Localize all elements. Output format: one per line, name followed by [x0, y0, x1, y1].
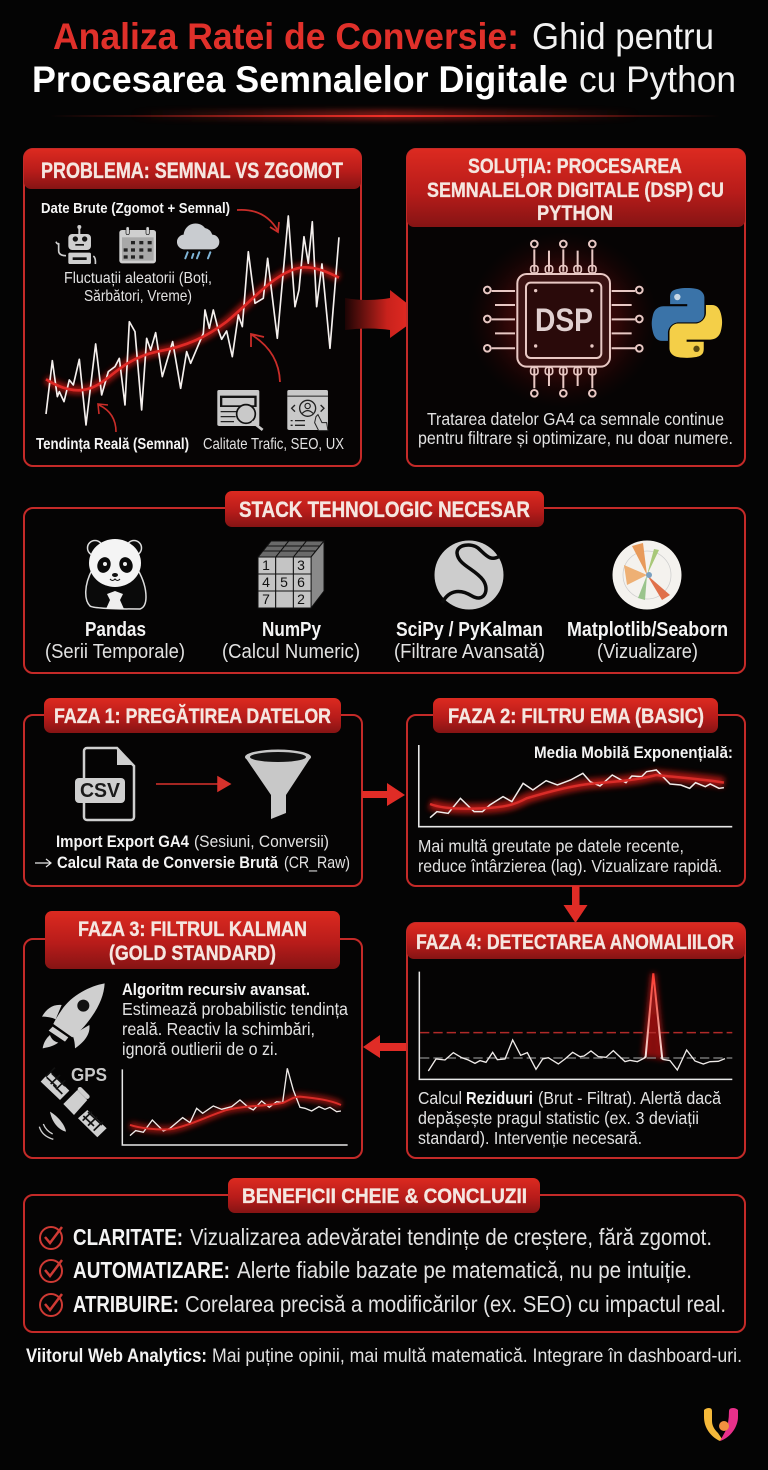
icon: web search — [217, 390, 263, 430]
footer conclusion: Mai puține opinii, mai multă matematică. Integrare în dashboard-uri. — [212, 1346, 742, 1367]
problem header — [24, 149, 361, 189]
benefit: automation — [40, 1257, 692, 1283]
icon: polar chart — [612, 540, 682, 610]
icon: python logo — [652, 288, 722, 358]
icon: scipy logo — [434, 540, 504, 610]
phase 3 description: Algoritm recursiv avansat. — [122, 980, 310, 999]
arrow: phase 1 to phase 2 — [362, 783, 405, 806]
benefit: automation: AUTOMATIZARE: — [73, 1257, 230, 1283]
tool: scipy: SciPy / PyKalman — [396, 619, 543, 641]
phase 1 heading — [44, 698, 341, 733]
problem header: PROBLEMA: SEMNAL VS ZGOMOT — [41, 158, 343, 183]
icon: funnel — [245, 750, 311, 819]
phase 1 description: (Sesiuni, Conversii) — [194, 832, 329, 851]
title: cu Python — [579, 59, 736, 100]
benefits heading — [228, 1178, 540, 1213]
icon: number cube — [258, 541, 324, 608]
solution description: pentru filtrare și optimizare, nu doar numere. — [418, 428, 733, 448]
phase 4 description — [418, 1088, 721, 1148]
arrow: csv to funnel — [156, 777, 230, 791]
Kalman chart — [122, 1068, 348, 1145]
title rule — [50, 110, 720, 120]
solution description — [418, 409, 733, 448]
tool: scipy: (Filtrare Avansată) — [394, 640, 545, 663]
icon: DSP chip — [468, 232, 658, 408]
phase 3 heading: FAZA 3: FILTRUL KALMAN — [78, 918, 307, 941]
phase 3 description: ignoră outlierii de o zi. — [122, 1039, 278, 1059]
phase 3 description — [122, 980, 348, 1059]
tool: numpy: (Calcul Numeric) — [222, 640, 360, 663]
arrow: phase 4 to phase 3 — [363, 1035, 407, 1058]
EMA label: Media Mobilă Exponențială: — [534, 744, 733, 762]
title — [32, 16, 736, 100]
icon: number cube: 6 — [297, 574, 305, 590]
noise causes label — [64, 270, 212, 305]
icon: number cube: 7 — [262, 591, 270, 607]
arrow: phase 2 to phase 4 — [564, 886, 588, 923]
icon: number cube: 2 — [297, 591, 305, 607]
phase 3 description: Estimează probabilistic tendința — [122, 999, 348, 1019]
phase 4 description: standard). Intervenție necesară. — [418, 1128, 642, 1148]
benefit: clarity: Vizualizarea adevăratei tendințe de creștere, fără zgomot. — [190, 1224, 712, 1250]
title: Procesarea Semnalelor Digitale — [32, 59, 568, 100]
solution header: SOLUȚIA: PROCESAREA — [468, 155, 682, 178]
noise causes label: Fluctuații aleatorii (Boți, — [64, 270, 212, 287]
benefit: clarity: CLARITATE: — [73, 1224, 183, 1250]
arrow: problem to solution — [345, 290, 422, 338]
real trend label: Tendința Reală (Semnal) — [36, 436, 189, 453]
phase 1 description — [35, 832, 350, 872]
tool: matplotlib: (Vizualizare) — [597, 640, 698, 663]
tool: matplotlib: Matplotlib/Seaborn — [567, 619, 728, 641]
phase 4 description: Reziduuri — [466, 1088, 533, 1108]
tool: pandas — [45, 539, 185, 663]
icon: brand logo — [704, 1408, 738, 1441]
solution description: Tratarea datelor GA4 ca semnale continue — [427, 409, 724, 429]
icon: number cube: 5 — [280, 574, 288, 590]
solution header: SEMNALELOR DIGITALE (DSP) CU — [427, 179, 724, 202]
icon: calendar — [119, 227, 156, 263]
panel: solution — [407, 149, 745, 466]
stack heading — [225, 491, 544, 527]
panel: phase 2 — [407, 698, 745, 886]
panel: phase 4 — [407, 923, 745, 1158]
tool: matplotlib — [567, 540, 728, 663]
tool: numpy: NumPy — [262, 619, 322, 641]
panel: phase 3 — [24, 911, 362, 1158]
phase 1 description: Import Export GA4 — [56, 832, 189, 851]
solution header: PYTHON — [537, 202, 613, 225]
arrow: to real trend — [98, 404, 116, 432]
phase 2 description: Mai multă greutate pe datele recente, — [418, 836, 684, 856]
icon: number cube: 3 — [297, 557, 305, 573]
phase 1 description: (CR_Raw) — [284, 853, 350, 872]
phase 2 heading — [433, 698, 718, 733]
phase 1 heading: FAZA 1: PREGĂTIREA DATELOR — [54, 705, 331, 728]
benefit: automation: Alerte fiabile bazate pe matematică, nu pe intuiție. — [237, 1257, 692, 1283]
phase 3 heading: (GOLD STANDARD) — [109, 942, 276, 965]
icon: web user — [287, 390, 328, 431]
icon: rain cloud — [177, 223, 219, 258]
benefits heading: BENEFICII CHEIE & CONCLUZII — [242, 1185, 527, 1208]
icon: number cube: 4 — [262, 574, 270, 590]
icon: CSV file — [75, 748, 134, 820]
panel: problem — [24, 149, 361, 466]
noisy signal chart — [46, 216, 339, 425]
phase 2 description: reduce întârzierea (lag). Vizualizare rapidă. — [418, 856, 722, 876]
icon: DSP chip: DSP — [535, 302, 593, 338]
tool: pandas: (Serii Temporale) — [45, 640, 185, 663]
noise causes label: Sărbători, Vreme) — [84, 288, 192, 305]
traffic quality label: Calitate Trafic, SEO, UX — [203, 436, 344, 453]
icon: GPS satellite: GPS — [71, 1065, 107, 1085]
panel: phase 1 — [24, 698, 362, 886]
panel: tech stack — [24, 491, 745, 673]
phase 4 description: Calcul — [418, 1088, 462, 1108]
phase 3 heading — [45, 911, 340, 969]
anomaly chart — [419, 972, 732, 1079]
phase 4 header — [407, 923, 745, 959]
title: Ghid pentru — [532, 16, 714, 57]
solution header — [407, 149, 745, 227]
icon: robot — [56, 225, 95, 264]
raw data label: Date Brute (Zgomot + Semnal) — [41, 200, 230, 217]
phase 1 description: Calcul Rata de Conversie Brută — [57, 853, 278, 872]
tool: numpy — [222, 541, 360, 663]
title: Analiza Ratei de Conversie: — [53, 16, 519, 57]
phase 4 description: (Brut - Filtrat). Alertă dacă — [538, 1088, 721, 1108]
benefit: attribution: ATRIBUIRE: — [73, 1291, 179, 1317]
tool: pandas: Pandas — [85, 619, 146, 641]
icon: number cube: 1 — [262, 557, 270, 573]
footer conclusion: Viitorul Web Analytics: — [26, 1346, 207, 1367]
phase 4 description: depășește pragul statistic (ex. 3 deviații — [418, 1108, 699, 1128]
panel: benefits — [24, 1178, 745, 1332]
phase 2 description — [418, 836, 722, 876]
phase 3 description: reală. Reactiv la schimbări, — [122, 1019, 315, 1039]
stack heading: STACK TEHNOLOGIC NECESAR — [239, 497, 530, 522]
tool: scipy — [394, 540, 545, 663]
arrow: to quality — [251, 334, 280, 382]
icon: CSV file: CSV — [80, 780, 121, 802]
arrow: to raw data — [237, 210, 279, 232]
EMA chart — [419, 745, 732, 827]
phase 2 heading: FAZA 2: FILTRU EMA (BASIC) — [448, 705, 704, 728]
icon: panda — [86, 539, 146, 609]
icon: GPS satellite — [39, 1065, 107, 1139]
icon: rocket — [42, 983, 105, 1048]
